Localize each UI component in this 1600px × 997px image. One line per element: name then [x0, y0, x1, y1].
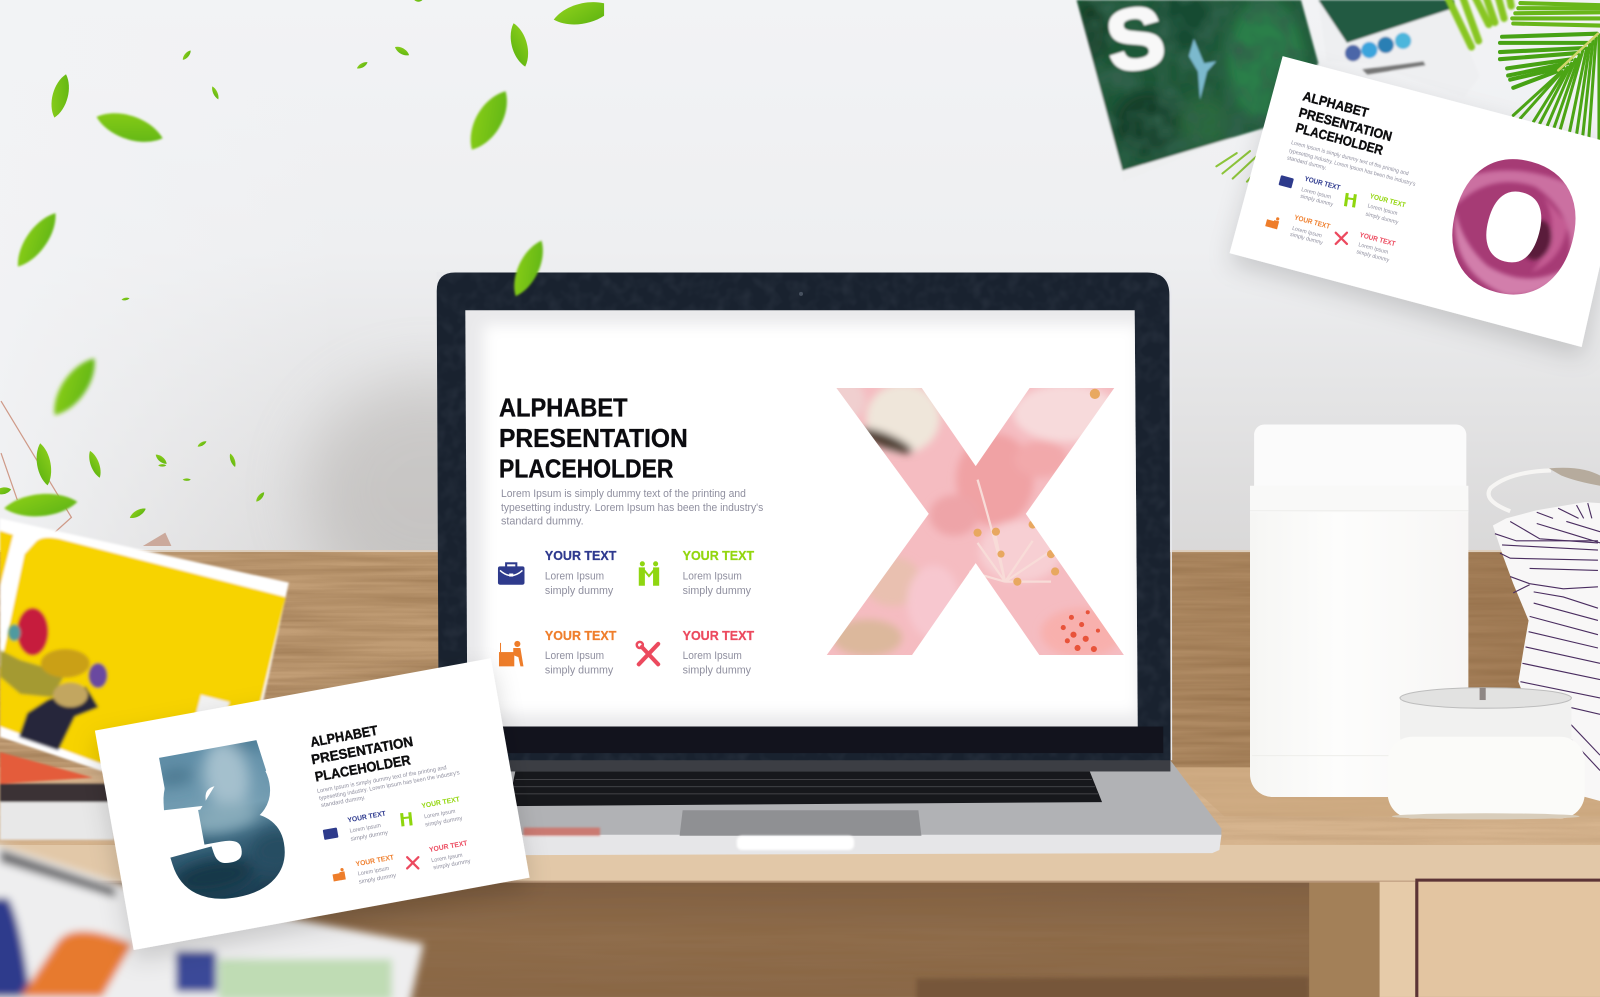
item: orange: Lorem Ipsum	[545, 650, 604, 662]
slide title: PRESENTATION	[499, 425, 688, 453]
slide card: number 3	[95, 658, 530, 950]
blurred background card: forest S	[1076, 0, 1321, 182]
white bottle	[1250, 425, 1468, 797]
card description: standard dummy.	[321, 795, 366, 809]
palm leaf	[1216, 0, 1600, 182]
card description: typesetting industry. Lorem Ipsum has been the industry's	[319, 770, 460, 802]
slide title	[499, 394, 688, 484]
card items: YOUR TEXT	[1293, 214, 1331, 231]
card items: YOUR TEXT	[347, 809, 387, 824]
item: orange	[545, 628, 616, 676]
card items: simply dummy	[358, 873, 397, 886]
hinge	[490, 753, 1170, 771]
item: blue	[545, 548, 616, 597]
item: blue: YOUR TEXT	[545, 548, 616, 563]
card items: simply dummy	[1289, 232, 1324, 246]
icon: handshake	[639, 561, 659, 586]
card items: simply dummy	[1299, 194, 1334, 208]
bezel	[437, 272, 1171, 760]
card items: YOUR TEXT	[355, 853, 395, 868]
screen slide	[465, 310, 1153, 727]
item: red: simply dummy	[683, 664, 752, 676]
card title: PLACEHOLDER	[314, 752, 412, 785]
shelf top	[0, 767, 1600, 883]
trackpad	[680, 810, 921, 836]
upper fan	[1500, 34, 1597, 88]
card description: standard dummy.	[1286, 155, 1328, 172]
card items: YOUR TEXT	[1359, 231, 1397, 248]
icon: briefcase	[498, 563, 524, 585]
back wood panel	[0, 550, 1600, 781]
card items	[1289, 175, 1407, 264]
pink wire ornament	[1, 401, 171, 546]
yellow-green fronds	[1447, 0, 1511, 47]
wall	[0, 0, 1600, 556]
card items: YOUR TEXT	[421, 795, 461, 810]
blurred stack under yellow card	[0, 752, 114, 840]
item: red: Lorem Ipsum	[683, 650, 742, 662]
card items: YOUR TEXT	[1369, 192, 1407, 210]
letter X with flower photo fill	[826, 388, 1124, 655]
card items	[347, 795, 471, 886]
icon: person at desk	[499, 641, 523, 666]
card items: YOUR TEXT	[429, 839, 469, 854]
card description: Lorem Ipsum is simply dummy text of the printing and	[317, 765, 447, 795]
blurred background card: social	[1318, 0, 1480, 97]
card items: Lorem Ipsum	[1301, 187, 1332, 201]
card title: ALPHABET	[309, 723, 380, 750]
card description: Lorem Ipsum is simply dummy text of the printing and	[1290, 140, 1409, 177]
keyboard	[508, 771, 1102, 806]
item: red: YOUR TEXT	[683, 628, 754, 643]
plane	[1189, 39, 1216, 100]
letter O with rose photo fill	[1452, 159, 1576, 295]
top fan	[1512, 3, 1600, 26]
card items: simply dummy	[433, 859, 471, 871]
card title: PLACEHOLDER	[1294, 120, 1385, 158]
item: green: Lorem Ipsum	[683, 571, 742, 583]
icon: tools	[637, 642, 658, 664]
card title: ALPHABET	[1301, 88, 1370, 120]
item: blue: Lorem Ipsum	[545, 571, 604, 583]
laptop shadow on wall	[306, 378, 551, 602]
card title	[1294, 88, 1394, 158]
slide description: Lorem Ipsum is simply dummy text of the printing and	[501, 488, 746, 500]
card items: Lorem Ipsum	[1358, 242, 1389, 256]
item: blue: simply dummy	[545, 585, 614, 597]
item: green: YOUR TEXT	[683, 548, 754, 563]
sticker smudge	[523, 828, 600, 836]
card items: Lorem Ipsum	[1291, 226, 1323, 240]
slide title: ALPHABET	[499, 394, 628, 422]
numeral 3 with mountain photo fill	[159, 740, 285, 899]
slide title: PLACEHOLDER	[499, 456, 673, 484]
card items: Lorem Ipsum	[431, 853, 463, 864]
slide description: standard dummy.	[501, 516, 584, 528]
yellow panel	[0, 531, 13, 587]
card title	[309, 723, 414, 785]
laptop base	[490, 760, 1221, 837]
drawer and leg	[1380, 879, 1600, 997]
lower fan	[1513, 35, 1599, 140]
slide card: letter O	[1230, 56, 1600, 347]
card title: PRESENTATION	[310, 734, 414, 767]
item: orange: YOUR TEXT	[545, 628, 616, 643]
slide description	[501, 488, 763, 528]
blurred yellow slide card	[0, 518, 289, 771]
card items: Lorem Ipsum	[349, 823, 382, 835]
front lip highlight	[737, 836, 854, 850]
item: green	[683, 548, 754, 597]
card items: Lorem Ipsum	[1367, 203, 1398, 217]
card items: simply dummy	[1356, 249, 1390, 264]
palm tips behind card	[1216, 150, 1270, 182]
striped cloth	[1489, 468, 1600, 801]
floating leaves	[0, 0, 616, 520]
slide description: typesetting industry. Lorem Ipsum has been the industry's	[501, 502, 763, 514]
card items: Lorem Ipsum	[357, 866, 390, 878]
card items: simply dummy	[425, 816, 463, 829]
blurred foreground card	[0, 839, 423, 997]
card items: YOUR TEXT	[1304, 175, 1342, 192]
card icons	[323, 812, 418, 881]
card description: typesetting industry. Lorem Ipsum has been the industry's	[1288, 148, 1416, 188]
white fragment	[196, 695, 230, 719]
card items: Lorem Ipsum	[424, 809, 456, 820]
laptop	[437, 272, 1221, 855]
base front lip	[490, 835, 1221, 855]
item: green: simply dummy	[683, 585, 752, 597]
item: orange: simply dummy	[545, 664, 614, 676]
card items: simply dummy	[1365, 211, 1399, 226]
card items: simply dummy	[350, 830, 389, 843]
flower basket photo	[0, 608, 107, 750]
rachis	[1558, 34, 1598, 70]
candle jar	[1388, 688, 1585, 819]
under-shelf wood	[0, 878, 1600, 997]
card icons	[1265, 175, 1357, 244]
card title: PRESENTATION	[1297, 105, 1394, 144]
item: red	[683, 628, 754, 676]
